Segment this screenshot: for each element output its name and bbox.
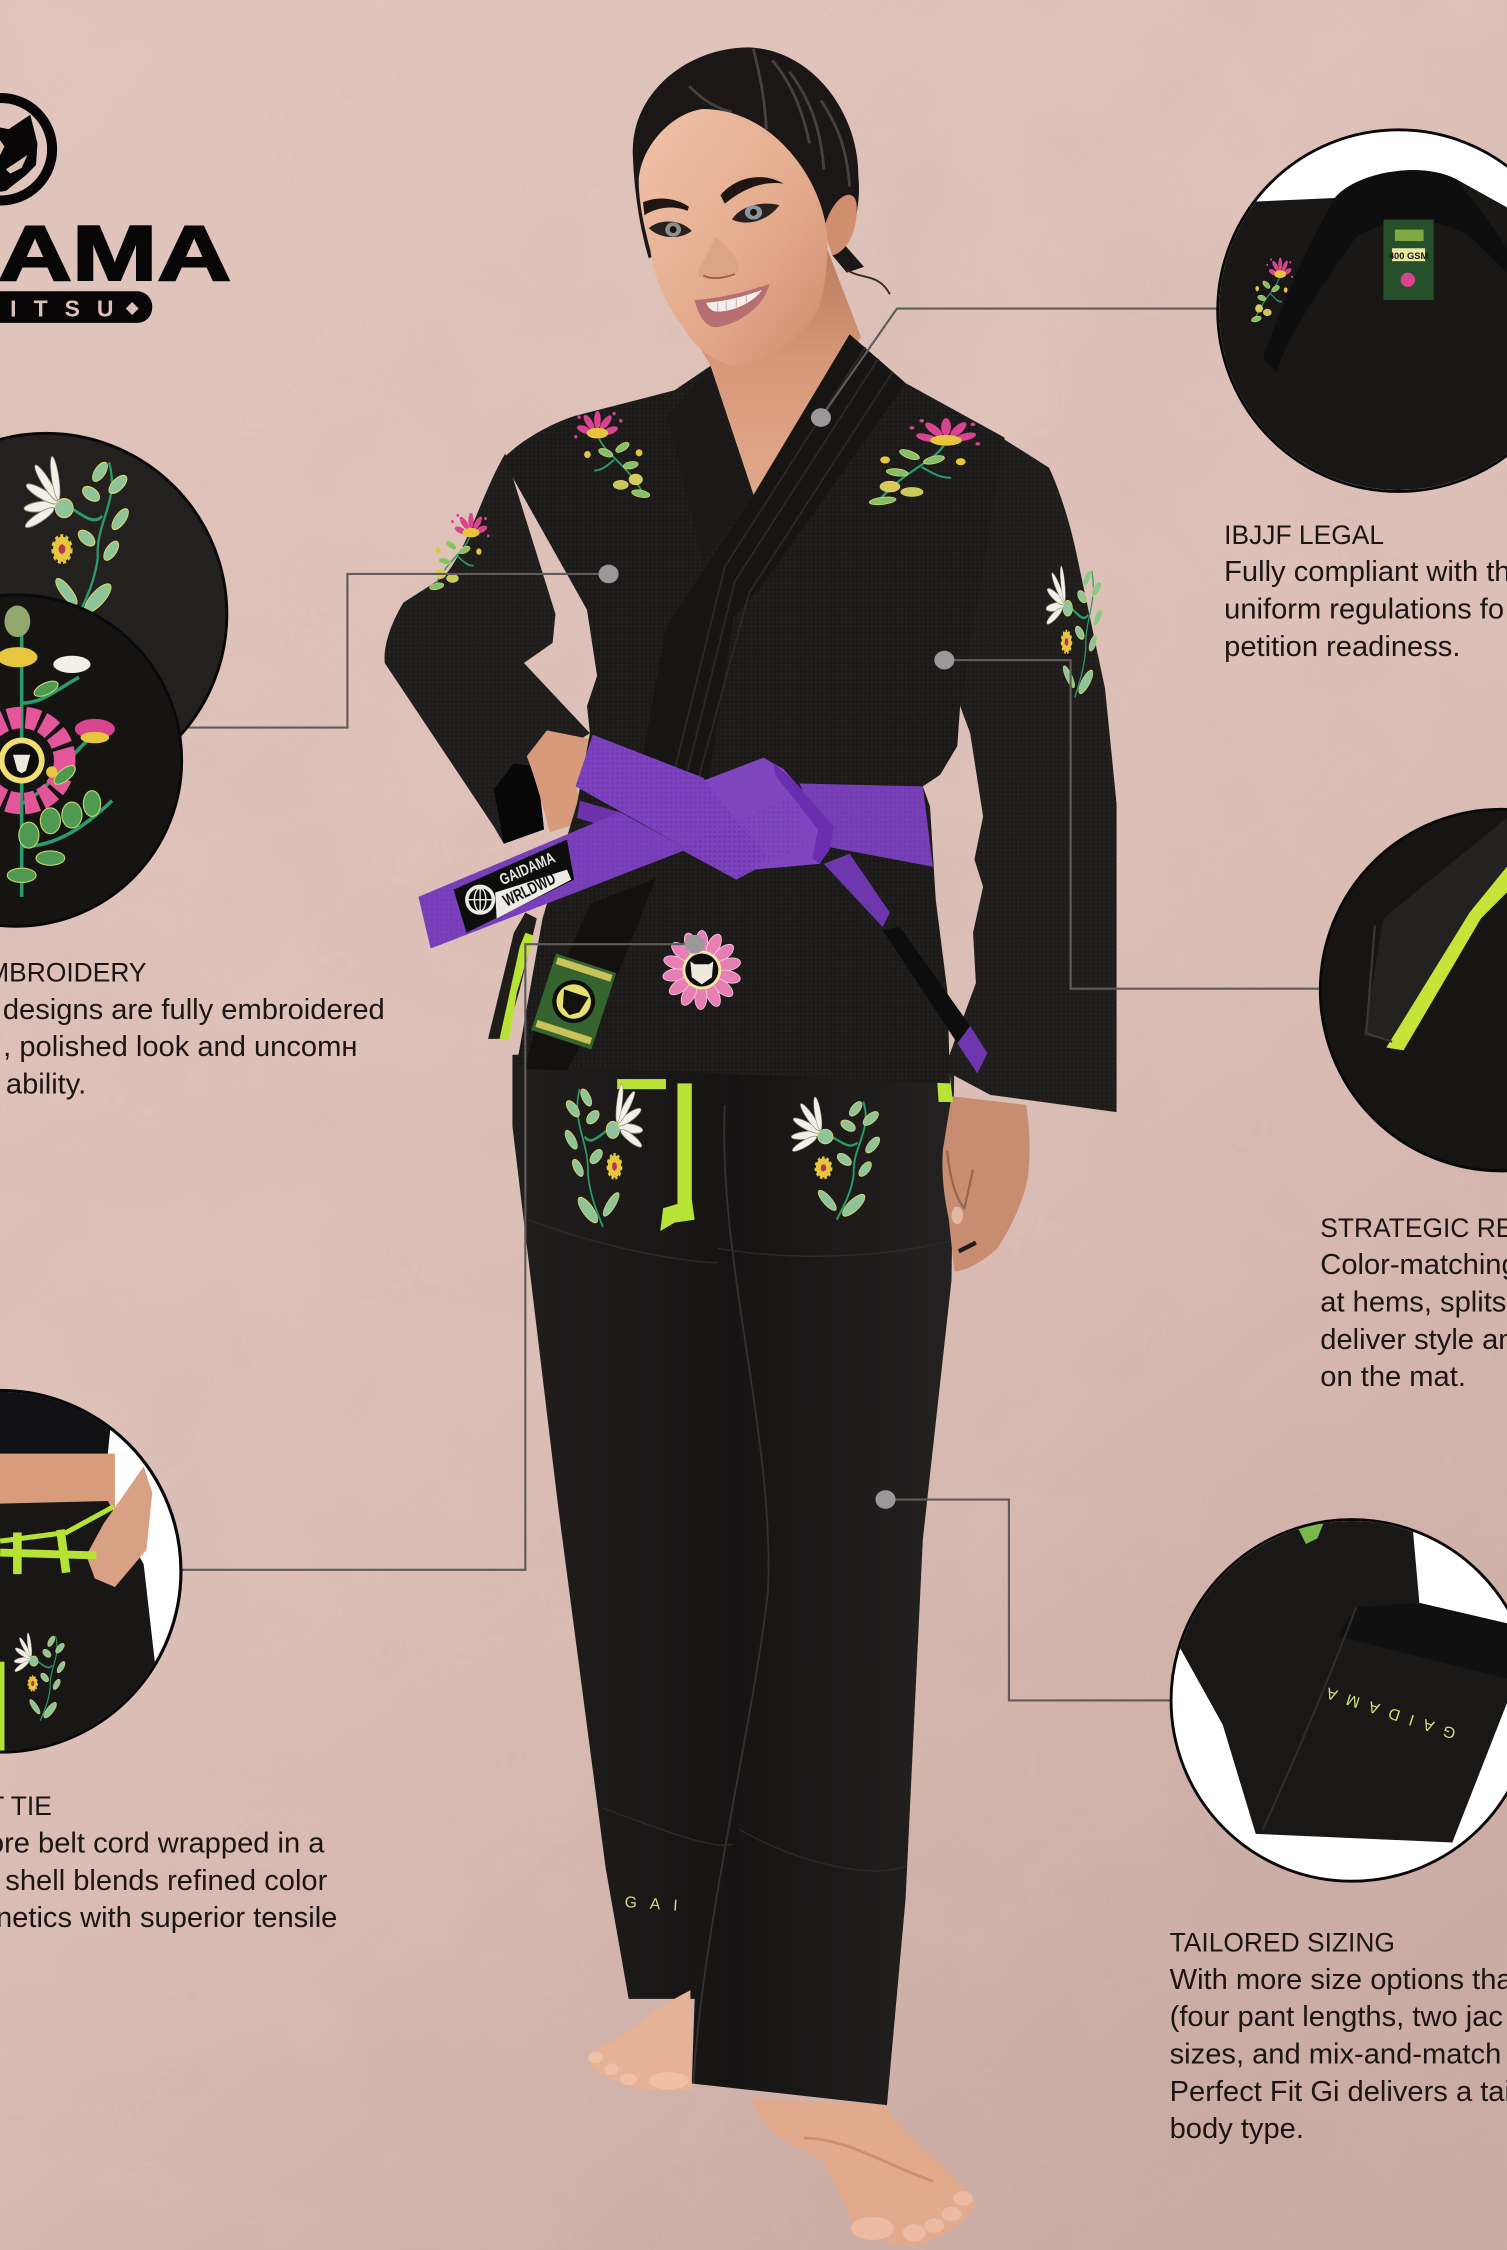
circle: IBJJF collar detail (1206, 130, 1507, 517)
text: belt tie: netics with superior tensile (0, 1902, 337, 1934)
text: strategic reinforcement: on the mat. (1320, 1361, 1466, 1393)
circle: reinforcement detail (1320, 809, 1507, 1171)
connector: IBJJF legal (811, 309, 1220, 427)
text: strategic reinforcement (1320, 1213, 1507, 1393)
text: tailored sizing: TAILORED SIZING (1170, 1928, 1395, 1958)
embroidery: right pant (791, 1096, 882, 1220)
circle: IBJJF collar detail: 400 GSM (1389, 251, 1428, 261)
belt (418, 735, 987, 1073)
logo tagline pill: ITSU (10, 295, 114, 321)
logo emblem (0, 98, 52, 200)
circle: embroidery top detail (0, 433, 227, 795)
text: tailored sizing (1170, 1928, 1507, 2145)
logo: Gaidama Jiu Jitsu (0, 98, 231, 323)
embroidery: left chest (574, 411, 650, 499)
sleeve opening (494, 763, 544, 844)
text: IBJJF legal: IBJJF LEGAL (1224, 520, 1384, 550)
right sleeve (950, 430, 1117, 1112)
belt back strap (577, 801, 620, 824)
text: embroidery: designs are fully embroidered (3, 994, 385, 1026)
text: belt tie (0, 1791, 337, 1934)
lower lapel (524, 878, 656, 1070)
hem letters: GAIDAMA (1315, 1680, 1458, 1741)
ear (824, 195, 857, 255)
belt left tail (418, 792, 804, 949)
embroidery: left sleeve (429, 513, 489, 591)
face (639, 109, 827, 366)
left hand on hip (527, 730, 590, 832)
text: embroidery: ability. (6, 1068, 86, 1100)
belt upper strap (576, 735, 766, 880)
logo tagline pill (0, 291, 152, 323)
belt right band (799, 783, 933, 867)
connector: embroidery (182, 565, 619, 728)
right hand (942, 1096, 1030, 1271)
belt label (454, 839, 574, 933)
text: IBJJF legal: Fully compliant with th (1224, 556, 1507, 588)
text: IBJJF legal (1224, 520, 1507, 663)
embroidery: belly flower (662, 931, 742, 1010)
pant leg letters: GAI (624, 1894, 691, 1916)
circle: embroidery mandala detail (0, 595, 182, 926)
connector: belt tie (182, 935, 705, 1570)
text: IBJJF legal: petition readiness. (1224, 631, 1460, 663)
text: belt tie: shell blends refined color (5, 1865, 328, 1897)
text: IBJJF legal: uniform regulations fo (1224, 593, 1504, 625)
jacket patch (531, 954, 616, 1049)
circle: pants detail (1171, 1518, 1507, 1881)
right foot (752, 2098, 975, 2246)
belt label: GAIDAMA (497, 850, 558, 889)
jacket torso (502, 334, 1005, 1083)
text: embroidery: , polished look and uncomн (3, 1031, 357, 1063)
left collar (667, 366, 754, 562)
figure: woman wearing black gi (385, 47, 1117, 2246)
connector: tailored sizing (875, 1490, 1171, 1700)
belt knot loop (703, 758, 834, 870)
neck (686, 244, 861, 495)
connector: reinforcement (934, 651, 1320, 989)
circle: belt tie detail (0, 1385, 181, 1758)
text: embroidery (0, 958, 385, 1100)
embroidery: right chest (869, 418, 980, 506)
green cords and stripes (488, 913, 953, 1231)
belt right tail (824, 854, 987, 1073)
hair (633, 47, 890, 294)
embroidery: right sleeve (1046, 565, 1104, 698)
right lapel (637, 334, 906, 786)
pants (512, 1055, 954, 2105)
left sleeve (385, 453, 590, 844)
left foot (588, 1990, 692, 2091)
belt label: WRLDWD (500, 868, 559, 910)
text: tailored sizing: (four pant lengths, two jac (1170, 2001, 1503, 2033)
embroidery: left pant (563, 1083, 643, 1227)
text: tailored sizing: With more size options tha (1170, 1964, 1507, 1996)
text: tailored sizing: body type. (1170, 2113, 1304, 2145)
